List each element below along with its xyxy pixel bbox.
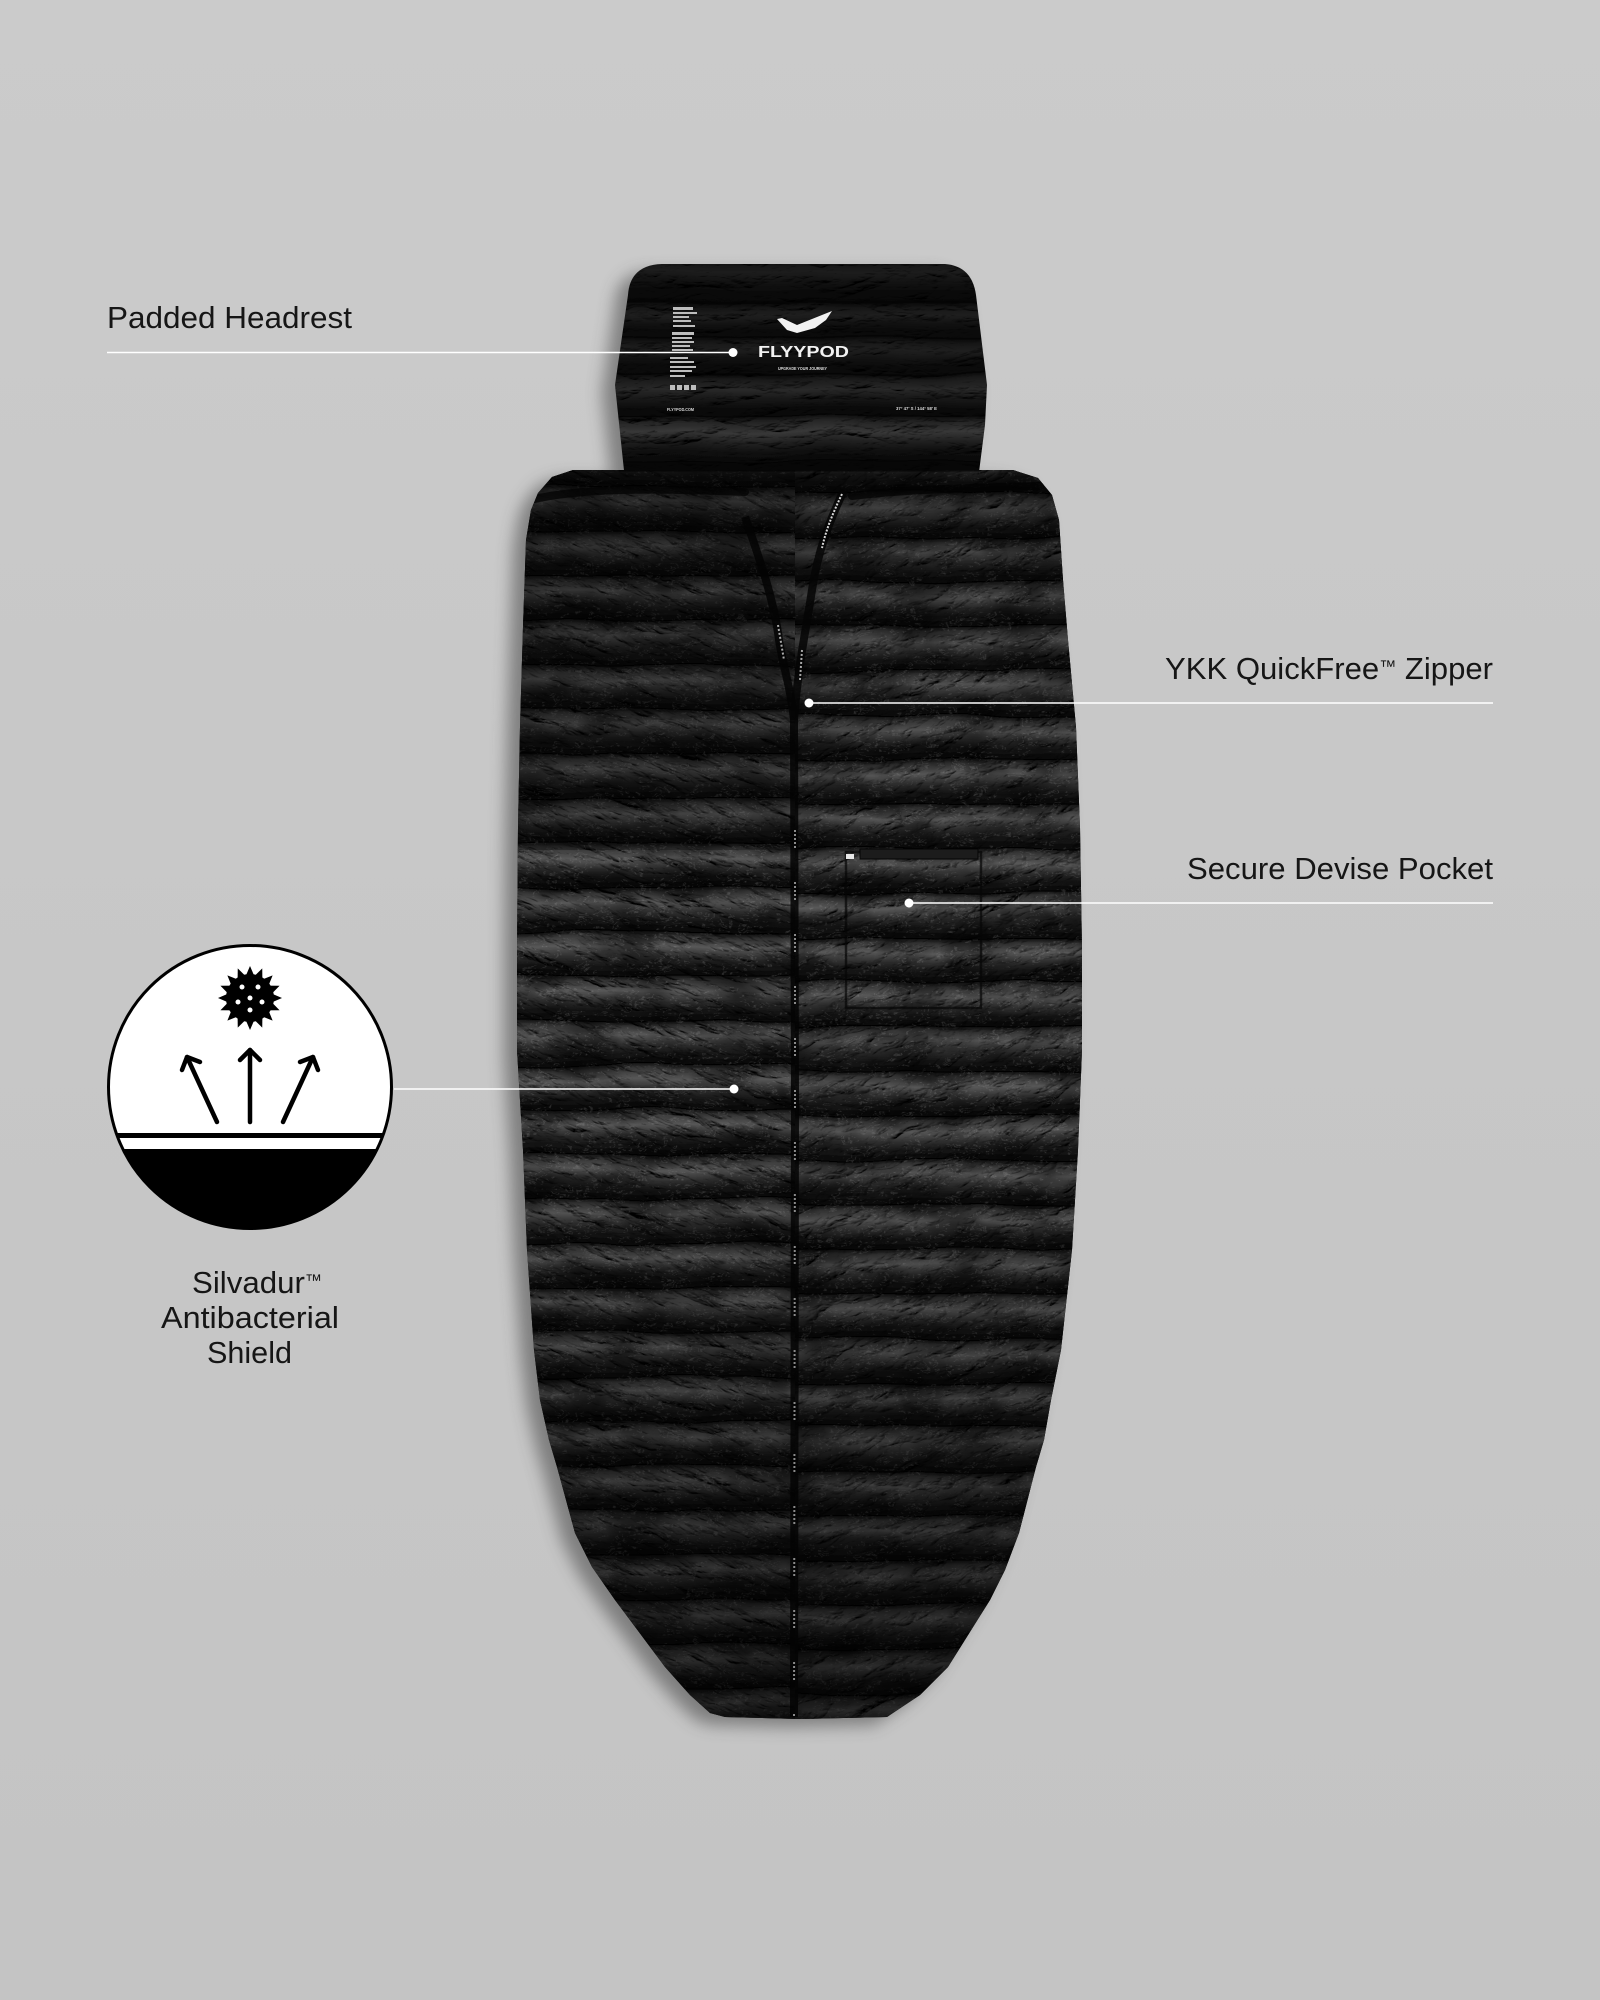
collar folds	[530, 470, 1040, 500]
coordinates: 37° 47' S / 144° 58' E	[896, 406, 937, 411]
callout: padded headrest: Padded Headrest	[107, 300, 352, 335]
icon: wing logo	[777, 311, 832, 333]
left half quilting	[517, 470, 795, 1719]
callout: padded headrest	[107, 300, 738, 357]
callout: zipper	[804, 651, 1493, 708]
headrest	[615, 264, 987, 470]
callout: antibacterial shield	[100, 946, 738, 1370]
caption: ™	[305, 1271, 322, 1290]
icon: bacterium	[218, 966, 282, 1030]
icon: antibacterial shield circle	[100, 946, 400, 1239]
tagline: UPGRADE YOUR JOURNEY	[778, 366, 827, 371]
callout: pocket	[904, 851, 1493, 908]
caption: Shield	[207, 1335, 292, 1370]
device pocket	[846, 849, 981, 1008]
callout: zipper: YKK QuickFree	[1165, 651, 1379, 686]
sleeping bag main body	[517, 470, 1082, 1719]
sleeping bag shadow	[504, 272, 1069, 1727]
caption: Antibacterial	[161, 1300, 339, 1335]
callout: zipper: ™	[1379, 657, 1396, 676]
caption	[161, 1265, 339, 1370]
icon: arrows	[182, 1050, 318, 1122]
brand name: FLYYPOD	[758, 344, 849, 361]
right half quilting	[795, 470, 1082, 1719]
care label text	[670, 307, 697, 390]
website: FLYYPOD.COM	[667, 407, 694, 412]
callout: pocket: Secure Devise Pocket	[1187, 851, 1493, 886]
callout: zipper: Zipper	[1396, 651, 1493, 686]
upper left darkening	[518, 470, 827, 850]
caption: Silvadur	[192, 1265, 304, 1300]
headrest branding	[667, 307, 937, 412]
main zipper	[745, 490, 844, 1717]
